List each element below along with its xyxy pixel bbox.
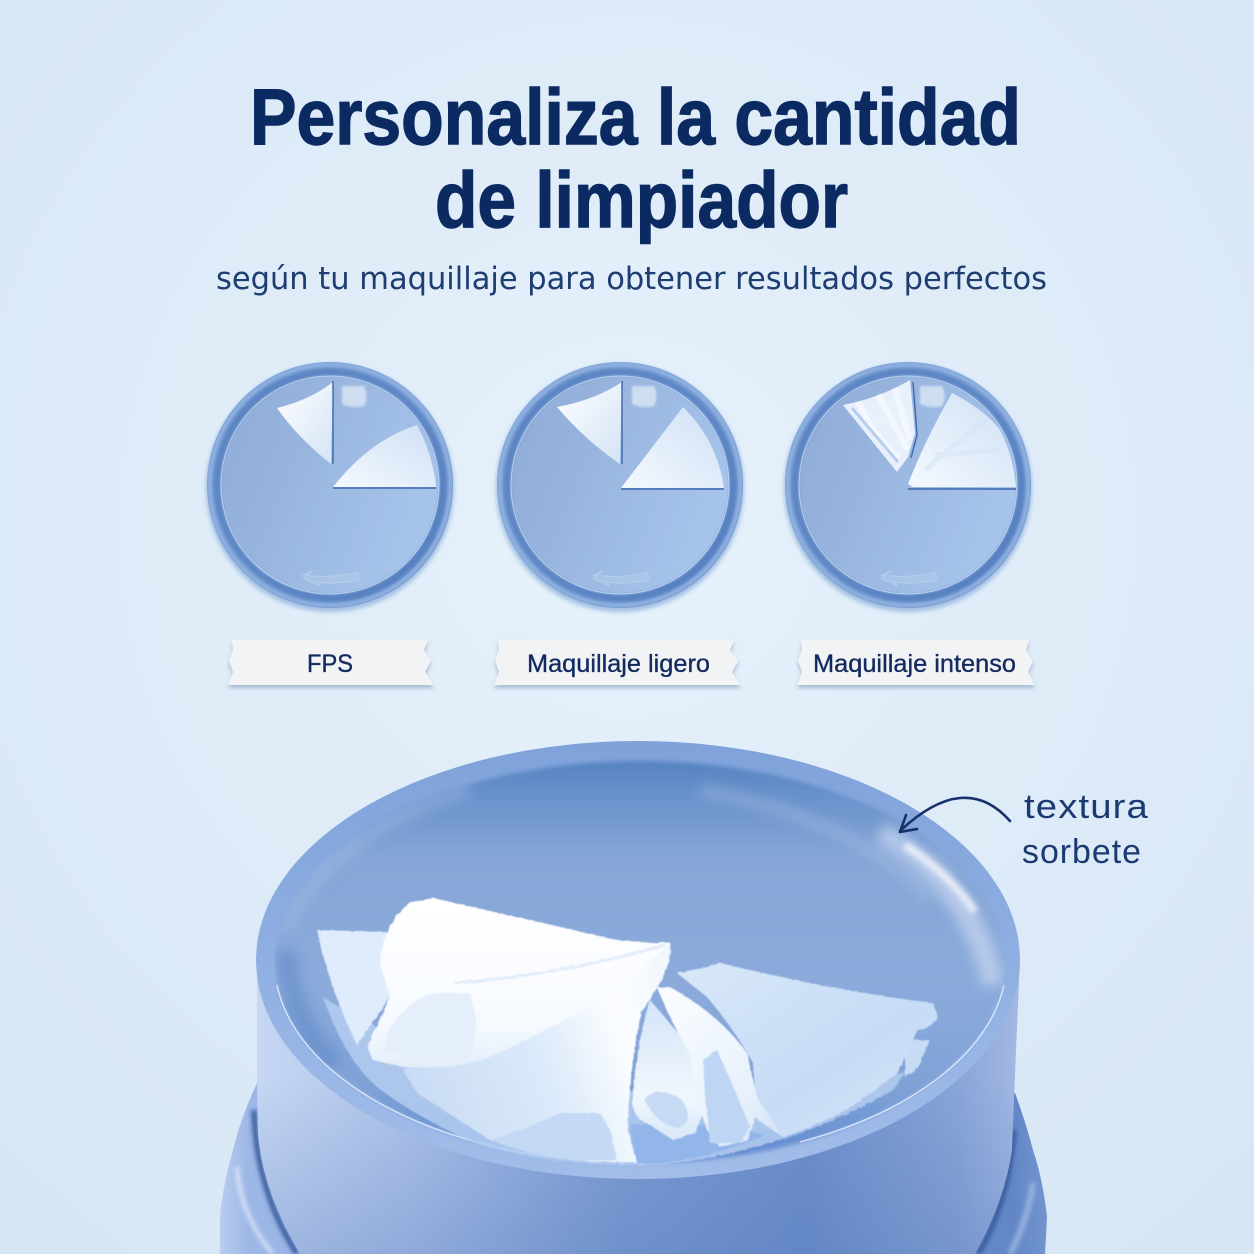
plate: Maquillaje intenso [784, 362, 1032, 612]
title: Personaliza la cantidad [250, 72, 1021, 161]
inner curl [383, 993, 477, 1058]
annotation arrow [900, 798, 1010, 832]
annotation: textura sorbete [1022, 788, 1149, 871]
inner well [275, 761, 1005, 1163]
right under flap [905, 1040, 930, 1077]
small roll [632, 1000, 709, 1140]
plate: Maquillaje ligero [496, 362, 744, 612]
bowl body [257, 960, 1020, 1254]
annotation: textura sorbete: textura [1024, 788, 1149, 826]
top fold [367, 898, 670, 1067]
label: Maquillaje ligero [494, 640, 741, 685]
sorbet texture pieces [317, 898, 938, 1165]
tissue wedges: ligero [557, 381, 724, 489]
title [250, 72, 1021, 244]
annotation: textura sorbete: sorbete [1022, 833, 1142, 871]
label: Maquillaje intenso [797, 640, 1035, 685]
back left piece [317, 930, 390, 1045]
tissue wedges: intenso [843, 380, 1016, 489]
second roll [657, 987, 783, 1147]
bowl product [220, 741, 1047, 1254]
right half disc [677, 963, 938, 1137]
large cone [403, 942, 671, 1163]
lip lines [277, 985, 1004, 1162]
subtitle: según tu maquillaje para obtener resultados perfectos [216, 261, 1047, 297]
label: FPS [228, 640, 434, 685]
label: Maquillaje intenso: Maquillaje intenso [813, 650, 1016, 678]
title: de limpiador [435, 155, 848, 244]
label: Maquillaje ligero: Maquillaje ligero [527, 650, 710, 678]
plate: FPS [206, 362, 454, 612]
label: FPS: FPS [307, 650, 353, 678]
melted under layer [323, 997, 905, 1165]
lower ring [220, 1083, 1047, 1254]
ring gap [254, 1110, 1014, 1254]
tissue wedges: FPS [277, 381, 436, 488]
bowl rim [256, 741, 1020, 1179]
